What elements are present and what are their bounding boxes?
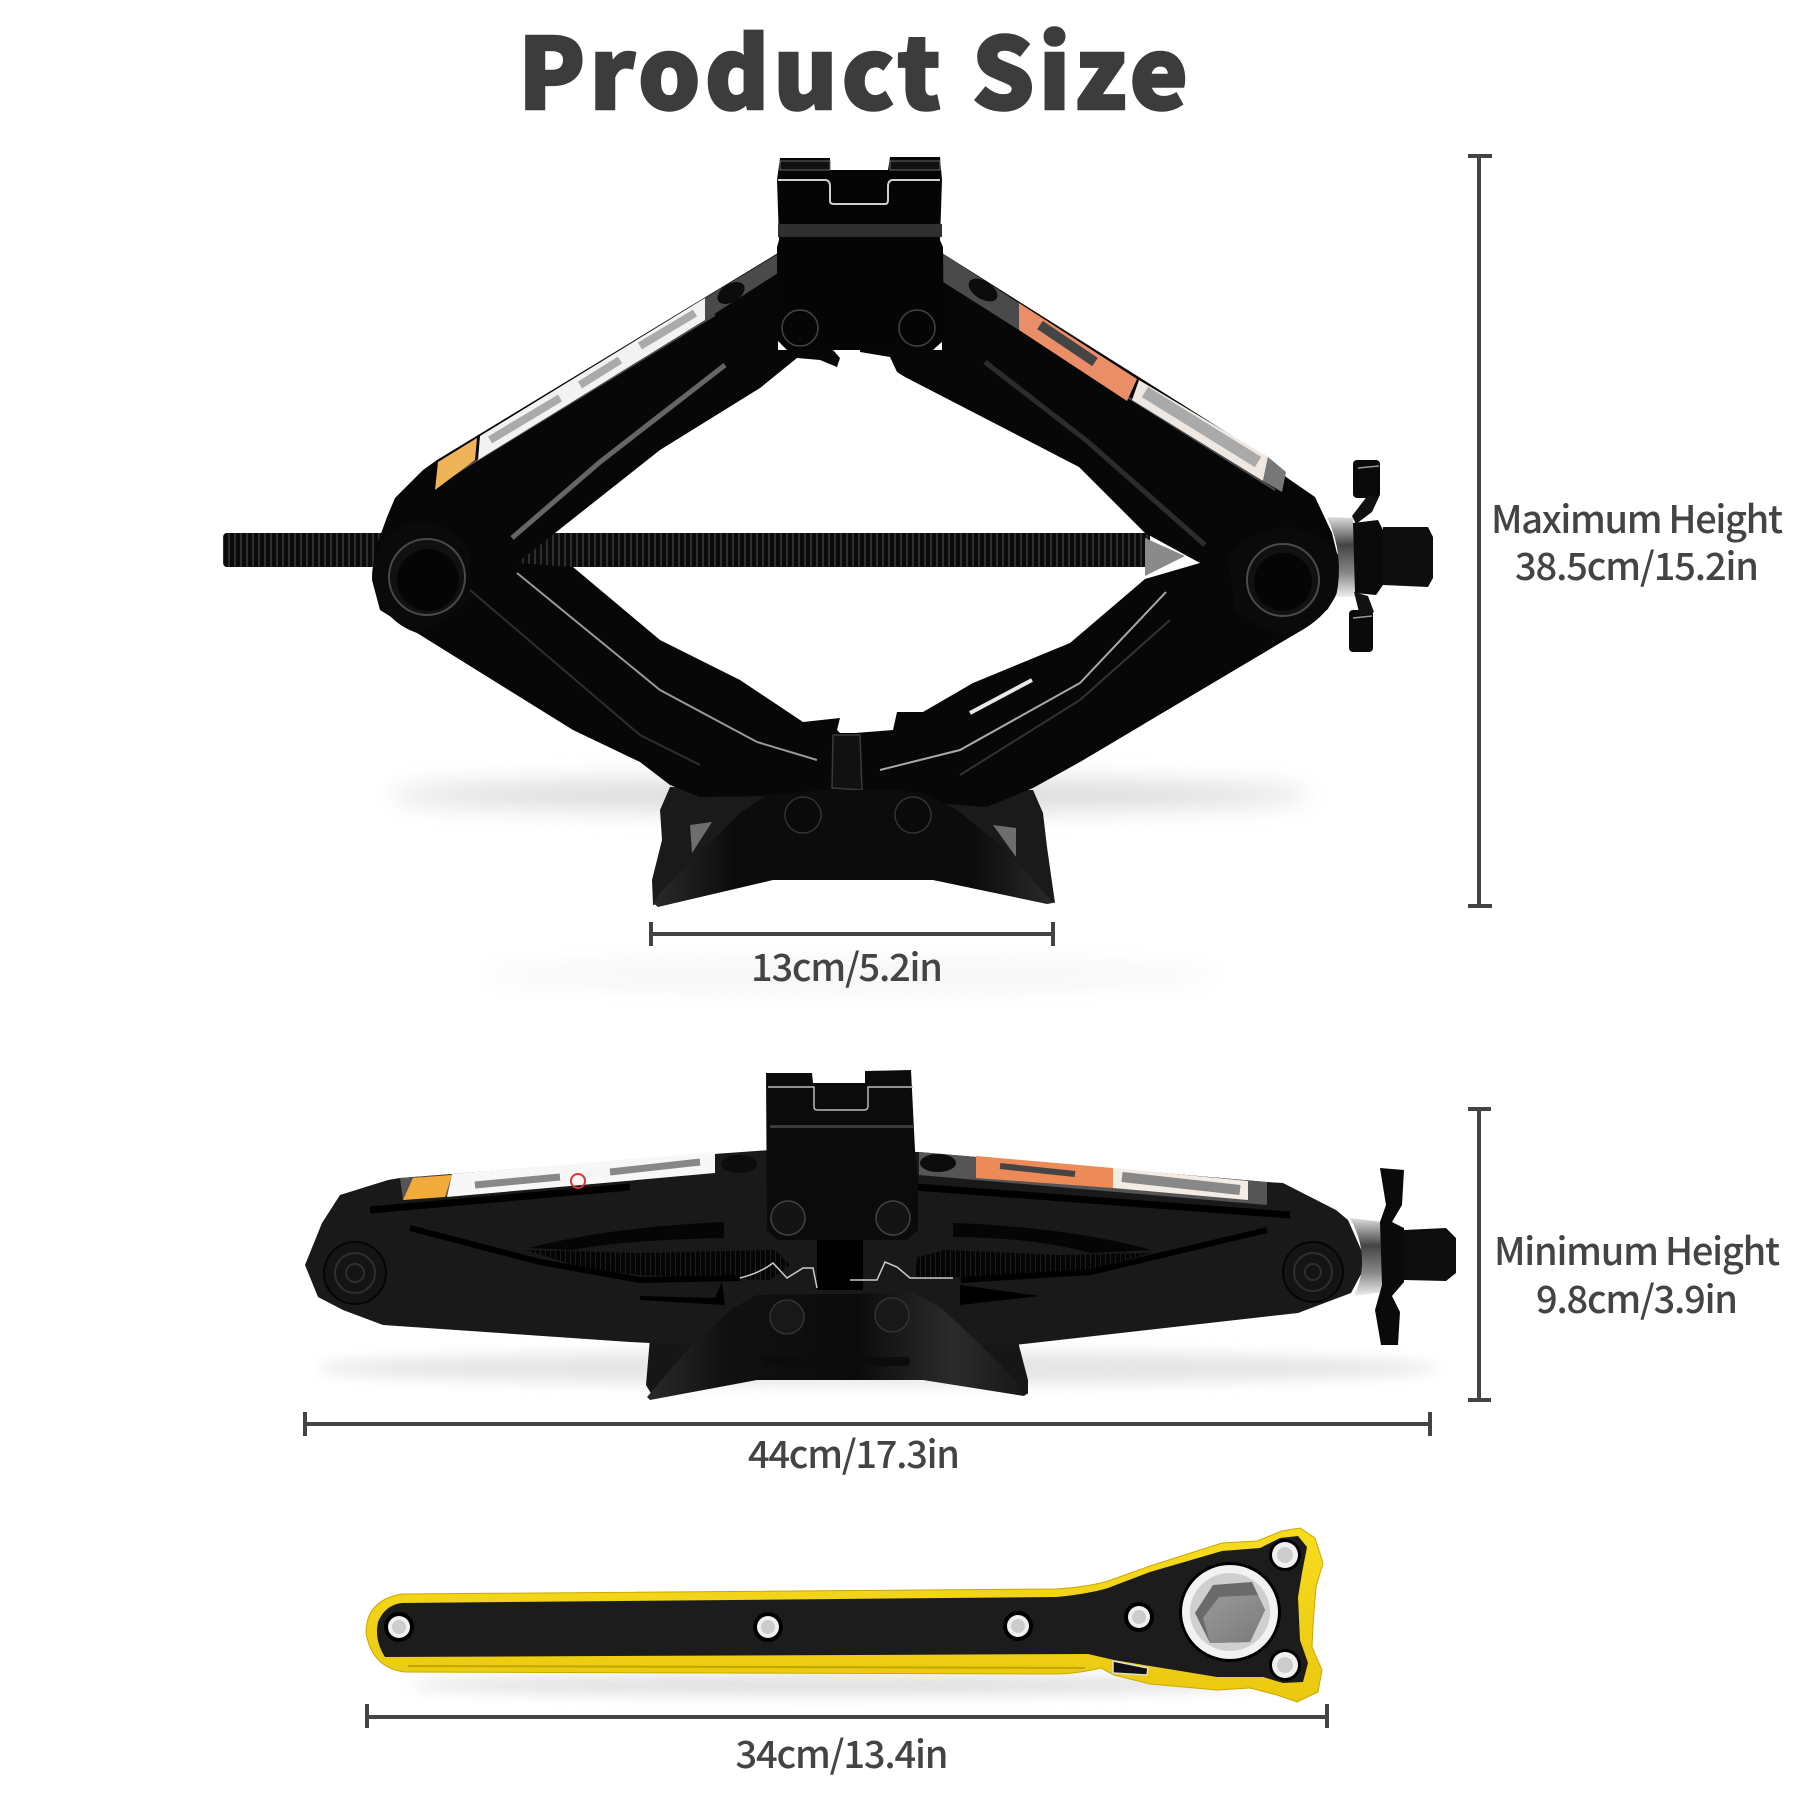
right arms: [830, 253, 1342, 807]
lock slider: [1113, 1661, 1148, 1675]
left arms: [372, 253, 840, 797]
top saddle: [777, 157, 944, 350]
scissor jack at minimum height: [305, 1070, 1456, 1400]
base width label: 13cm/5.2in: [751, 937, 943, 992]
right warning label: [942, 253, 1286, 492]
left pivot: [324, 1242, 386, 1304]
base side highlights: [690, 822, 1016, 857]
base plate: [647, 1293, 1028, 1400]
minimum height dimension line: [1468, 1109, 1491, 1400]
body: [305, 1150, 1367, 1345]
jack shadow: [390, 778, 1310, 989]
base width dimension line: [651, 922, 1053, 946]
rod end collar: [1145, 538, 1185, 576]
left pivot: [372, 522, 470, 633]
base side flanges: [646, 1338, 1028, 1395]
black face: [377, 1536, 1308, 1683]
ratchet wrench handle: [366, 1528, 1323, 1702]
right pivot: [1283, 1242, 1343, 1302]
threaded rod: [223, 533, 1150, 567]
base front plate: [653, 790, 1053, 907]
bolts: [384, 1539, 1301, 1681]
wing nut and knob: [1327, 460, 1433, 652]
scissor jack at maximum height: [223, 157, 1433, 989]
left warning label: [435, 254, 778, 490]
wing nut and knob: [1350, 1168, 1456, 1345]
yellow rim: [366, 1528, 1323, 1702]
minimum height value: 9.8cm/3.9in: [1536, 1269, 1738, 1324]
wrench shadow: [410, 1675, 1250, 1695]
top saddle: [766, 1070, 918, 1240]
minimum height label: Minimum Height: [1494, 1221, 1780, 1276]
body relief: [370, 1187, 1290, 1305]
hex socket: [1179, 1562, 1281, 1662]
arm labels: [400, 1152, 1267, 1205]
wrench length label: 34cm/13.4in: [736, 1724, 948, 1779]
maximum height label: Maximum Height: [1491, 489, 1783, 544]
jack length dimension line: [305, 1412, 1430, 1436]
wrench length dimension line: [367, 1704, 1327, 1728]
maximum height dimension line: [1468, 156, 1492, 906]
base rear wings: [652, 787, 1055, 905]
maximum height value: 38.5cm/15.2in: [1515, 536, 1759, 591]
centre hinge detail: [832, 735, 862, 790]
arm highlights: [445, 282, 1275, 775]
rim groove: [408, 1666, 1085, 1668]
gear teeth: [740, 1262, 953, 1288]
jack length label: 44cm/17.3in: [748, 1424, 960, 1479]
right pivot: [1228, 527, 1342, 634]
jack shadow: [318, 1351, 1438, 1385]
title: Product Size: [518, 0, 1188, 138]
